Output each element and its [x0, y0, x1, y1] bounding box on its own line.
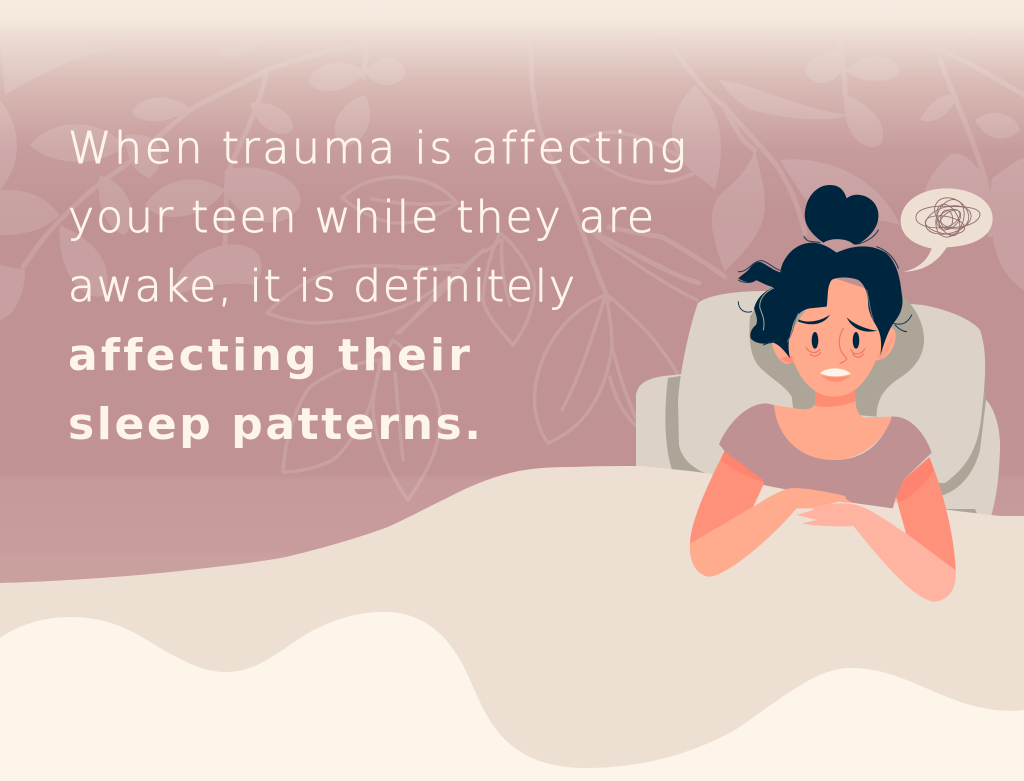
line 2: your teen while they are: [68, 192, 654, 243]
right eyebrow: [847, 317, 877, 332]
background gradient: [0, 0, 1024, 600]
tangled scribble: [916, 191, 980, 241]
teen neck and chest: [774, 390, 892, 460]
hair: [738, 243, 903, 358]
bubble shape: [901, 188, 993, 272]
right eye: [853, 332, 859, 349]
left upper arm: [690, 450, 764, 544]
teen head: [738, 185, 912, 397]
teeth: [820, 368, 851, 376]
line 1: When trauma is affecting: [68, 123, 686, 174]
hair highlights: [760, 288, 873, 342]
background botanical pattern: [0, 75, 1024, 502]
foreground cream wave: [0, 612, 1024, 781]
face: [787, 277, 884, 397]
neck shadow on pillow: [749, 273, 924, 417]
line 5 bold: sleep patterns.: [68, 399, 481, 450]
right upper arm: [896, 457, 956, 571]
left ear: [772, 340, 793, 364]
left sleeve shadow: [721, 450, 764, 482]
bun gap: [822, 239, 854, 253]
line 4 bold: affecting their: [68, 330, 470, 381]
right sleeve shadow: [896, 457, 934, 503]
right ear shade: [877, 333, 893, 360]
right ear: [873, 327, 896, 361]
main pillow: [678, 291, 985, 483]
pillows behind the teen: [636, 273, 1000, 520]
headline text: [68, 123, 686, 450]
hair bun: [805, 185, 878, 245]
teen upper body: [690, 403, 956, 602]
lower shadow wedge: [945, 509, 978, 516]
right forearm and hand: [797, 503, 956, 602]
bed sheet: [0, 466, 1024, 781]
left eyebrow: [798, 315, 830, 324]
left eye: [812, 332, 818, 349]
left forearm and hand: [690, 488, 855, 577]
thought bubble: [901, 188, 993, 272]
neck shadow: [815, 387, 855, 407]
left ear shade: [780, 355, 793, 363]
lower lip: [821, 375, 851, 382]
t-shirt: [719, 403, 932, 508]
pillow shadow: [665, 360, 986, 496]
line 3: awake, it is definitely: [68, 261, 575, 312]
back pillow: [636, 372, 1000, 520]
hair strands: [738, 230, 912, 345]
nose and eye bags: [806, 328, 865, 363]
filled leaves and stems: [0, 75, 1024, 502]
